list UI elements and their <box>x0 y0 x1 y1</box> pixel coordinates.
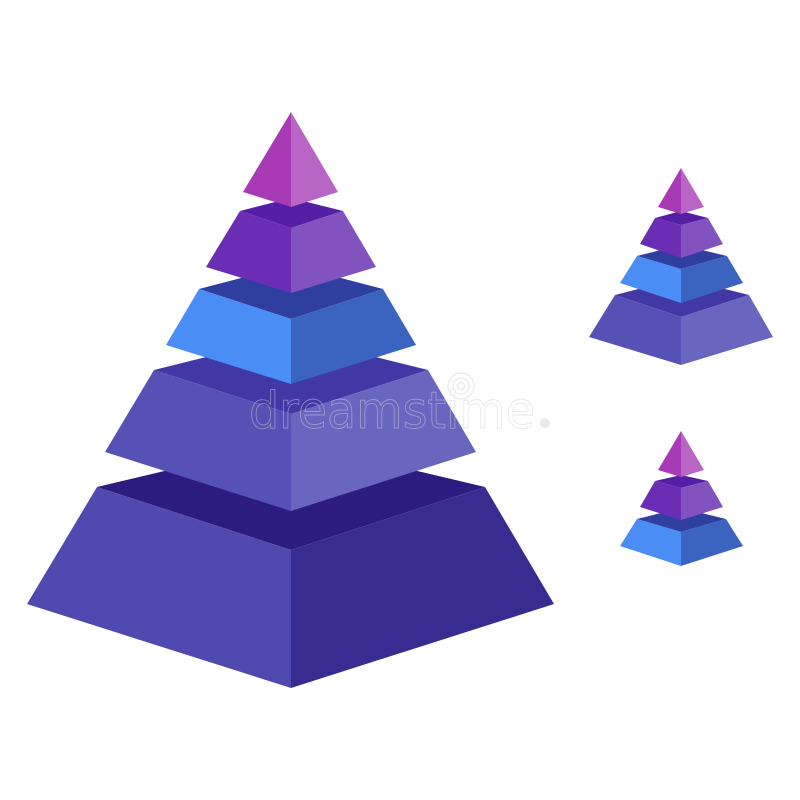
three-layer pyramid: magenta apex <box>658 431 704 477</box>
watermark spiral icon <box>448 373 474 399</box>
small four-layer pyramid <box>589 168 773 365</box>
small pyramid: magenta apex <box>658 168 704 214</box>
three-layer pyramid: blue tier <box>620 508 743 566</box>
layer 3: blue tier <box>166 265 416 384</box>
layer 1: magenta apex <box>243 112 338 207</box>
small pyramid: blue tier <box>620 245 743 303</box>
layer 2: violet tier <box>206 198 376 293</box>
watermark wordmark: dreamstime <box>249 382 535 441</box>
watermark dot <box>540 418 550 428</box>
layer 5: base tier <box>27 441 554 688</box>
small three-layer pyramid <box>620 431 743 566</box>
small pyramid: violet tier <box>640 211 723 258</box>
watermark <box>249 373 550 441</box>
large five-layer pyramid <box>27 112 554 688</box>
layer 4: indigo tier <box>105 336 476 511</box>
small pyramid: indigo tier <box>589 278 773 365</box>
three-layer pyramid: violet tier <box>640 475 723 520</box>
